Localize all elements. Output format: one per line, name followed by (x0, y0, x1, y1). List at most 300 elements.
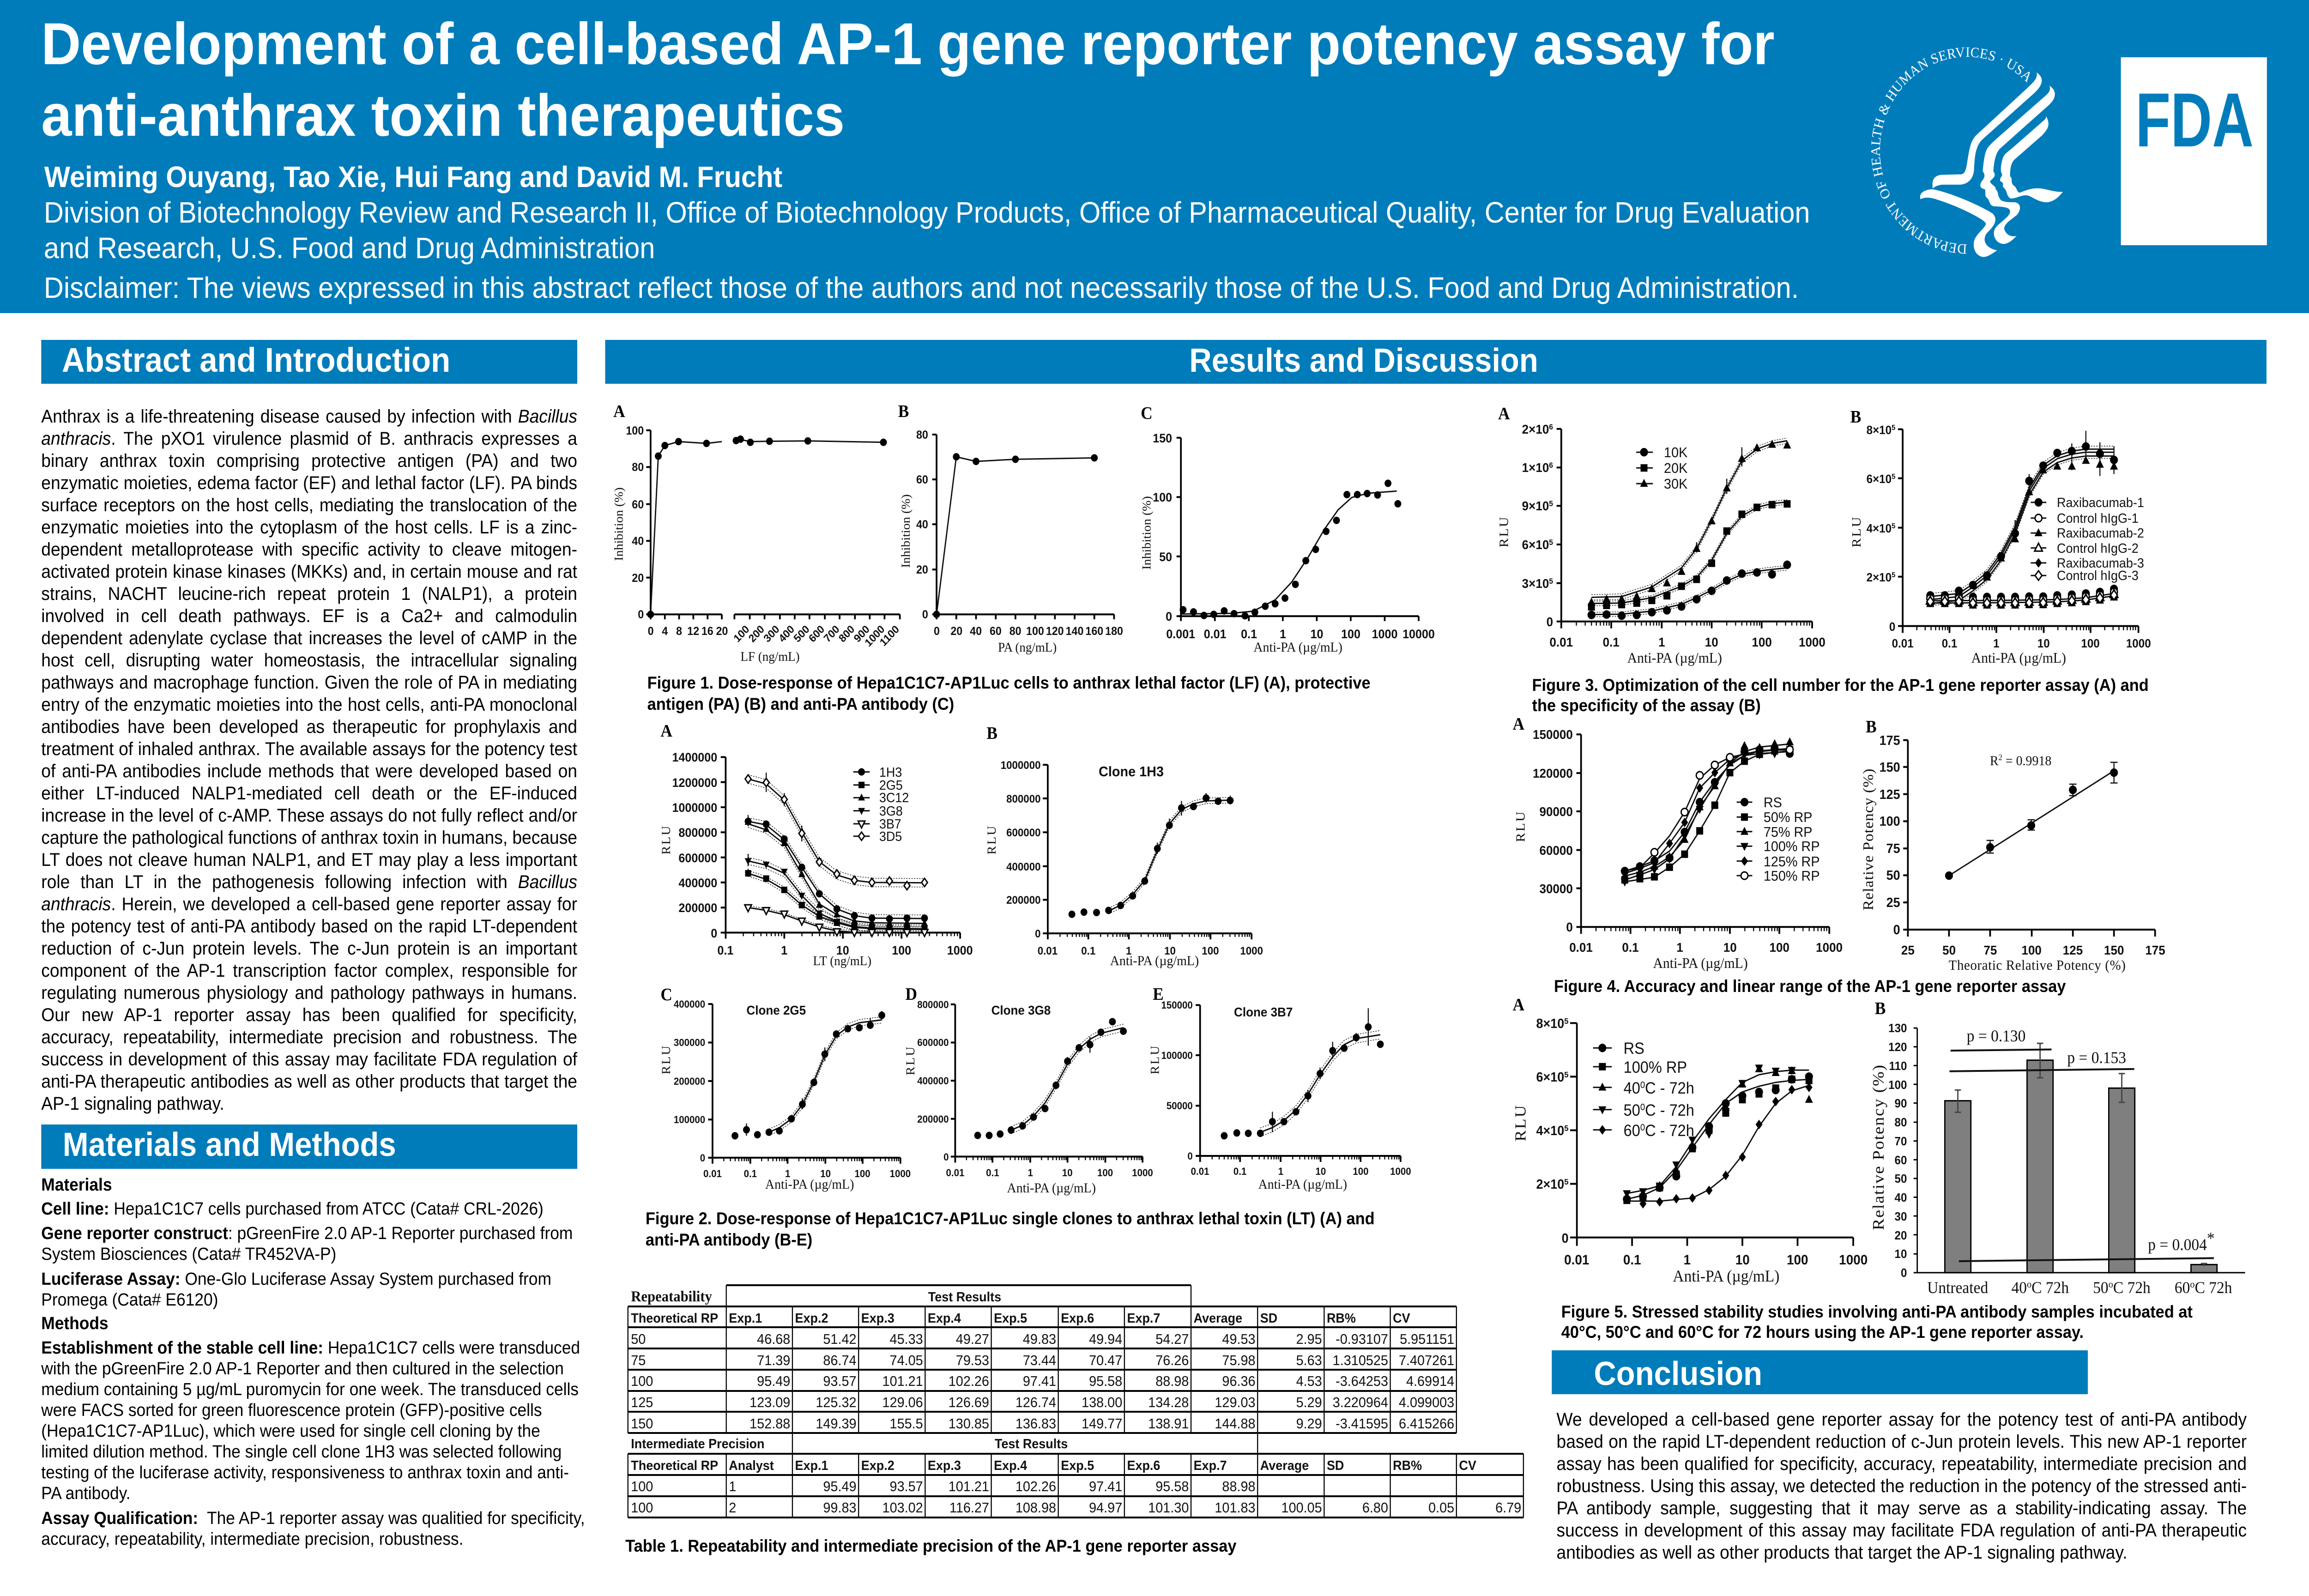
chart: figure 5A stressed samples dose-response: 100% RP (1624, 1058, 1687, 1076)
chart: figure 5A stressed samples dose-response: RLU (1512, 1104, 1529, 1141)
table: repeatability and intermediate precision: 79.53 (956, 1353, 989, 1368)
chart: figure 2B clone 1H3: 200000 (1006, 894, 1041, 906)
table: repeatability and intermediate precision: RB% (1393, 1458, 1422, 1473)
text block: materials and methods: were FACS sorted for green fluorescence protein (GFP)-positive cells (41, 1401, 542, 1420)
heading: Conclusion (1552, 1350, 2088, 1394)
chart: figure 2B clone 1H3: 400000 (1006, 860, 1041, 873)
text block: abstract: either LT-induced NALP1-mediated cell death or the EF-induced (41, 783, 577, 804)
chart: figure 3B assay specificity: 5 (1892, 571, 1896, 579)
panel: header banner (0, 0, 2309, 313)
chart: figure 1B inhibition vs PA: 60 (990, 625, 1002, 638)
chart: figure 2E clone 3B7: E (1153, 984, 1164, 1004)
table: repeatability and intermediate precision: 4.099003 (1399, 1395, 1454, 1410)
chart: figure 4B linearity: Theoratic Relative Potency (%) (1949, 957, 2126, 973)
chart: figure 2D clone 3G8: 0.1 (986, 1167, 999, 1179)
table: repeatability and intermediate precision: 129.06 (882, 1395, 923, 1410)
table: repeatability and intermediate precision: 49.94 (1089, 1331, 1122, 1347)
table: repeatability and intermediate precision: Exp.4 (928, 1311, 961, 1325)
text block: materials and methods: testing of the luciferase activity, responsiveness to anthrax toxin and anti- (41, 1463, 569, 1482)
heading: Materials and Methods (41, 1124, 577, 1169)
chart: figure 2A RLU vs LT for six clones: 1200000 (672, 775, 717, 790)
affiliation: Division of Biotechnology Review and Research II, Office of Biotechnology Products, Office of Pharmaceutical Quality, Center for Drug Evaluation (44, 196, 1810, 229)
table: repeatability and intermediate precision: Theoretical RP (631, 1311, 718, 1325)
chart: figure 2B clone 1H3 (985, 723, 1263, 968)
chart: figure 2E clone 3B7: 1 (1278, 1166, 1283, 1177)
chart: figure 4B linearity: 75 (1886, 841, 1900, 856)
chart: figure 1A inhibition vs LF: 4 (662, 625, 668, 638)
chart: figure 4B linearity: 150 (2104, 943, 2124, 957)
caption: figure 3: the specificity of the assay (B) (1532, 696, 1761, 715)
chart: figure 2C clone 2G5: C (660, 985, 672, 1004)
chart: figure 1A inhibition vs LF: 0 (648, 625, 654, 638)
text block: materials and methods: Materials (41, 1175, 112, 1195)
heading: Abstract and Introduction (41, 340, 577, 384)
table: repeatability and intermediate precision: 97.41 (1089, 1479, 1122, 1494)
chart: figure 2B clone 1H3: Clone 1H3 (1099, 764, 1164, 780)
chart: figure 3B assay specificity: 0 (1889, 620, 1895, 634)
chart: figure 4A accuracy dose-response: 75% RP (1764, 824, 1813, 840)
chart: figure 2E clone 3B7: 100000 (1161, 1050, 1193, 1061)
chart: figure 1A inhibition vs LF: 300 (761, 623, 781, 645)
chart: figure 2E clone 3B7: 0.01 (1191, 1166, 1209, 1177)
chart: figure 1A inhibition vs LF: 800 (836, 623, 857, 645)
text block: abstract: enzymatic moieties into the cytoplasm of the host cells. LF is a zinc- (41, 517, 577, 538)
chart: figure 2D clone 3G8: Anti-PA (µg/mL) (1007, 1180, 1096, 1196)
text block: materials and methods: PA antibody. (41, 1484, 131, 1503)
table: repeatability and intermediate precision: 75.98 (1222, 1353, 1256, 1368)
caption: table 1: Table 1. Repeatability and intermediate precision of the AP-1 gene reporter assay (625, 1536, 1237, 1555)
table: repeatability and intermediate precision: 73.44 (1023, 1353, 1056, 1368)
chart: figure 4B linearity: 150 (1880, 760, 1900, 774)
chart: figure 3A cell number optimization: 0 (1547, 615, 1553, 629)
table: repeatability and intermediate precision: 76.26 (1155, 1353, 1189, 1368)
table: repeatability and intermediate precision: 9.29 (1296, 1416, 1322, 1432)
table: repeatability and intermediate precision: 123.09 (750, 1395, 790, 1410)
chart: figure 2D clone 3G8: 0 (943, 1151, 949, 1163)
chart: figure 5B relative potency bars: 30 (1895, 1210, 1907, 1223)
chart: figure 1A inhibition vs LF: A (613, 401, 625, 421)
chart: figure 5B relative potency bars: C 72h (2031, 1278, 2069, 1297)
chart: figure 4A accuracy dose-response: 1000 (1816, 940, 1843, 955)
table: repeatability and intermediate precision: Average (1194, 1311, 1242, 1325)
chart: figure 1A inhibition vs LF: 60 (632, 498, 644, 511)
chart: figure 5B relative potency bars: 10 (1895, 1247, 1907, 1261)
text block: conclusion: robustness. Using this assay, we detected the reduction in the potency of the stressed anti- (1557, 1476, 2247, 1496)
chart: figure 3B assay specificity: 0.01 (1892, 637, 1914, 650)
chart: figure 2D clone 3G8: 100 (1097, 1167, 1113, 1179)
chart: figure 2C clone 2G5 (659, 985, 911, 1192)
text block: materials and methods: limited dilution method. The single cell clone 1H3 was selected following (41, 1442, 562, 1462)
chart: figure 5B relative potency bars: C 72h (2113, 1278, 2151, 1297)
text block: abstract: component of the AP-1 transcription factor complex, responsible for (41, 961, 577, 981)
chart: figure 3A cell number optimization: RLU (1497, 516, 1511, 547)
caption: figure 4: Figure 4. Accuracy and linear range of the AP-1 gene reporter assay (1554, 977, 2066, 996)
chart: figure 1B inhibition vs PA: Inhibition (%) (899, 494, 913, 568)
table: repeatability and intermediate precision: 95.49 (757, 1373, 790, 1389)
chart: figure 3B assay specificity: Control hIgG-3 (2057, 568, 2139, 583)
text block: abstract: capture the pathological functions of anthrax toxin in humans, because (41, 828, 577, 848)
table: repeatability and intermediate precision: 49.27 (956, 1331, 989, 1347)
chart: figure 2A RLU vs LT for six clones: 3C12 (879, 790, 909, 805)
chart: figure 5A stressed samples dose-response: C - 72h (1645, 1101, 1694, 1119)
text block: materials and methods: Methods (41, 1314, 109, 1333)
table: repeatability and intermediate precision: Exp.2 (795, 1311, 828, 1325)
chart: figure 2B clone 1H3: 800000 (1006, 792, 1041, 805)
chart: figure 1A inhibition vs LF (612, 401, 901, 664)
chart: figure 1A inhibition vs LF: 20 (716, 625, 728, 638)
table: repeatability and intermediate precision: 86.74 (823, 1353, 857, 1368)
text block: abstract: AP-1 signaling pathway. (41, 1094, 224, 1114)
chart: figure 3B assay specificity: 5 (1892, 424, 1896, 432)
chart: figure 1A inhibition vs LF: 100 (731, 623, 751, 645)
chart: figure 3A cell number optimization: 30K (1664, 476, 1687, 492)
chart: figure 3B assay specificity: Control hIgG-1 (2057, 511, 2139, 526)
affiliation: and Research, U.S. Food and Drug Administration (44, 231, 655, 265)
table: repeatability and intermediate precision: 100 (631, 1373, 653, 1389)
chart: figure 1A inhibition vs LF: 16 (701, 625, 713, 638)
chart: figure 3A cell number optimization: 3×10 (1522, 576, 1549, 591)
chart: figure 3A cell number optimization: 5 (1549, 500, 1553, 508)
table: repeatability and intermediate precision: SD (1260, 1311, 1277, 1325)
chart: figure 3B assay specificity: 8×10 (1867, 423, 1892, 437)
chart: figure 5B relative potency bars: 100 (1888, 1078, 1907, 1092)
chart: figure 3B assay specificity: Raxibacumab-3 (2057, 556, 2144, 570)
chart: figure 2B clone 1H3: 0 (1035, 927, 1041, 940)
chart: figure 1C inhibition vs anti-PA: 0.1 (1241, 627, 1257, 641)
chart: figure 4A accuracy dose-response: 30000 (1540, 882, 1573, 896)
chart: figure 3A cell number optimization: 5 (1549, 577, 1553, 586)
table: repeatability and intermediate precision: 108.98 (1015, 1500, 1056, 1516)
table: repeatability and intermediate precision: 5.63 (1296, 1353, 1322, 1368)
chart: figure 3B assay specificity: 1000 (2126, 637, 2151, 650)
caption: figure 5: 40°C, 50°C and 60°C for 72 hours using the AP-1 gene reporter assay. (1561, 1323, 2084, 1342)
chart: figure 5B relative potency bars: o (2027, 1278, 2031, 1290)
chart: figure 2A RLU vs LT for six clones: 1000 (947, 943, 973, 957)
chart: figure 5B relative potency bars: Untreated (1927, 1278, 1988, 1297)
chart: figure 2E clone 3B7: 10 (1316, 1166, 1326, 1177)
text block: abstract: anthracis. Herein, we developed a cell-based gene reporter assay for (41, 894, 577, 914)
chart: figure 3B assay specificity: RLU (1850, 516, 1864, 547)
chart: figure 4A accuracy dose-response (1513, 714, 1843, 971)
chart: figure 2C clone 2G5: 400000 (674, 998, 705, 1010)
table: repeatability and intermediate precision (628, 1285, 1523, 1517)
text block: abstract: dependent metalloprotease with specific activity to cleave mitogen- (41, 539, 577, 560)
chart: figure 4B linearity: 50 (1942, 943, 1956, 957)
chart: figure 1B inhibition vs PA: PA (ng/mL) (998, 640, 1057, 655)
chart: figure 4B linearity: R (1990, 753, 1999, 768)
table: repeatability and intermediate precision: Exp.4 (994, 1458, 1028, 1473)
chart: figure 2D clone 3G8: 1 (1028, 1167, 1033, 1179)
table: repeatability and intermediate precision: RB% (1327, 1311, 1356, 1325)
chart: figure 1B inhibition vs PA: 40 (970, 625, 982, 638)
chart: figure 1C inhibition vs anti-PA: 10000 (1402, 627, 1435, 641)
table: repeatability and intermediate precision: 101.30 (1148, 1500, 1189, 1516)
heading: Results and Discussion: Results and Discussion (1189, 342, 1538, 379)
table: repeatability and intermediate precision: -3.41595 (1336, 1416, 1388, 1432)
chart: figure 1C inhibition vs anti-PA: 1 (1280, 627, 1286, 641)
chart: figure 1C inhibition vs anti-PA: 150 (1153, 431, 1172, 445)
text block: abstract: regulating numerous physiology and pathology pathways in humans. (41, 983, 577, 1003)
chart: figure 5A stressed samples dose-response: C - 72h (1645, 1122, 1694, 1140)
chart: figure 5B relative potency bars: 120 (1888, 1040, 1907, 1054)
table: repeatability and intermediate precision: 103.02 (882, 1500, 923, 1516)
chart: figure 5A stressed samples dose-response: 2×10 (1536, 1177, 1564, 1191)
chart: figure 2A RLU vs LT for six clones: RLU (659, 825, 673, 854)
table: repeatability and intermediate precision: 74.05 (890, 1353, 923, 1368)
table: repeatability and intermediate precision: 49.53 (1222, 1331, 1256, 1347)
chart: figure 2C clone 2G5: RLU (659, 1045, 673, 1074)
table: repeatability and intermediate precision: 4.53 (1296, 1373, 1322, 1389)
heading: Results and Discussion (605, 340, 2267, 384)
chart: figure 3A cell number optimization: 1 (1658, 635, 1665, 649)
table: repeatability and intermediate precision: 125 (631, 1395, 653, 1410)
text block: abstract: pathways and macrophage function. Given the role of PA in mediating (41, 672, 577, 693)
chart: figure 1B inhibition vs PA: 180 (1105, 625, 1123, 638)
table: repeatability and intermediate precision: 4.69914 (1406, 1373, 1454, 1389)
chart: figure 1B inhibition vs PA: 140 (1066, 625, 1083, 638)
chart: figure 1A inhibition vs LF: Inhibition (%) (612, 487, 625, 561)
text block: materials and methods: Assay Qualification: The AP-1 reporter assay was qualitied for specificity, (41, 1509, 585, 1528)
chart: figure 2C clone 2G5: 300000 (674, 1037, 705, 1048)
chart: figure 2E clone 3B7: 0.1 (1233, 1166, 1246, 1177)
chart: figure 5B relative potency bars: 130 (1888, 1022, 1907, 1035)
chart: figure 4A accuracy dose-response: 0 (1566, 920, 1573, 934)
chart: figure 5A stressed samples dose-response (1512, 995, 1868, 1285)
text block: abstract: LT does not cleave human NALP1, and ET may play a less important (41, 850, 577, 870)
chart: figure 1C inhibition vs anti-PA: 0 (1166, 609, 1172, 623)
table: repeatability and intermediate precision: Exp.3 (861, 1311, 895, 1325)
chart: figure 1C inhibition vs anti-PA: Anti-PA (µg/mL) (1253, 640, 1342, 655)
chart: figure 4B linearity: 25 (1901, 943, 1915, 957)
table: repeatability and intermediate precision: 97.41 (1023, 1373, 1056, 1389)
authors: Weiming Ouyang, Tao Xie, Hui Fang and David M. Frucht (44, 160, 782, 193)
chart: figure 1A inhibition vs LF: 12 (687, 625, 699, 638)
table: repeatability and intermediate precision: 6.79 (1495, 1500, 1521, 1516)
chart: figure 1B inhibition vs PA: 120 (1046, 625, 1064, 638)
text block: conclusion: based on the rapid LT-dependent reduction of c-Jun protein levels. This new AP-1 reporter (1557, 1432, 2247, 1452)
table: repeatability and intermediate precision: 7.407261 (1399, 1353, 1454, 1368)
chart: figure 3A cell number optimization: 20K (1664, 460, 1687, 476)
table: repeatability and intermediate precision: Average (1260, 1458, 1309, 1473)
chart: figure 4A accuracy dose-response: 150000 (1533, 727, 1573, 742)
chart: figure 1A inhibition vs LF: 400 (776, 623, 797, 645)
table: repeatability and intermediate precision: SD (1327, 1458, 1344, 1473)
table: repeatability and intermediate precision: 95.58 (1155, 1479, 1189, 1494)
chart: figure 2E clone 3B7: 0 (1187, 1150, 1193, 1162)
chart: figure 5B relative potency bars: 60 (1895, 1154, 1907, 1167)
chart: figure 2B clone 1H3: Anti-PA (µg/mL) (1110, 953, 1199, 968)
table: repeatability and intermediate precision: -3.64253 (1336, 1373, 1388, 1389)
chart: figure 1A inhibition vs LF: 600 (806, 623, 827, 645)
chart: figure 2A RLU vs LT for six clones: 1H3 (879, 765, 902, 780)
chart: figure 1A inhibition vs LF: 20 (632, 572, 644, 585)
chart: figure 5B relative potency bars: 60 (2175, 1278, 2190, 1297)
chart: figure 5B relative potency bars: 50 (1895, 1172, 1907, 1185)
title (41, 8, 1775, 151)
chart: figure 1C inhibition vs anti-PA: 100 (1153, 490, 1172, 504)
chart: figure 5A stressed samples dose-response: 0 (1640, 1080, 1645, 1090)
chart: figure 5A stressed samples dose-response: 4×10 (1536, 1123, 1564, 1138)
text block: abstract (41, 405, 577, 1115)
chart: figure 1A inhibition vs LF: LF (ng/mL) (741, 649, 800, 664)
chart: figure 2D clone 3G8: 400000 (917, 1075, 949, 1087)
text block: conclusion: antibodies as well as other products that target the AP-1 signaling pathway. (1557, 1542, 2128, 1563)
table: repeatability and intermediate precision: Exp.6 (1127, 1458, 1160, 1473)
chart: figure 5A stressed samples dose-response: 10 (1735, 1252, 1750, 1268)
table: repeatability and intermediate precision: -0.93107 (1336, 1331, 1388, 1347)
chart: figure 3B assay specificity: 4×10 (1867, 522, 1892, 535)
chart: figure 3B assay specificity: 1 (1993, 637, 2000, 650)
table: repeatability and intermediate precision: 125.32 (816, 1395, 857, 1410)
table: repeatability and intermediate precision: 50 (631, 1331, 646, 1347)
caption: figure 3: Figure 3. Optimization of the cell number for the AP-1 gene reporter assay (A) and (1532, 676, 2149, 695)
chart: figure 4A accuracy dose-response: 150% RP (1764, 868, 1820, 884)
chart: figure 5A stressed samples dose-response: 0 (1640, 1123, 1645, 1133)
chart: figure 4A accuracy dose-response: 10 (1723, 940, 1737, 955)
heading: Materials and Methods: Materials and Methods (63, 1126, 396, 1163)
chart: figure 4A accuracy dose-response: 125% RP (1764, 854, 1820, 870)
chart: figure 5B relative potency bars: 90 (1895, 1097, 1907, 1110)
table: repeatability and intermediate precision: 2 (729, 1500, 736, 1516)
table: repeatability and intermediate precision: 126.69 (949, 1395, 989, 1410)
chart: figure 2C clone 2G5: 10 (820, 1168, 831, 1179)
chart: figure 3B assay specificity: 5 (1892, 473, 1896, 481)
chart: figure 3B assay specificity: 100 (2081, 637, 2100, 650)
text block: materials and methods: medium containing 5 µg/mL puromycin for one week. The transduced cells (41, 1380, 579, 1399)
chart: figure 1B inhibition vs PA: 0 (922, 608, 928, 621)
chart: figure 5B relative potency bars: Relative Potency (%) (1869, 1065, 1887, 1230)
chart: figure 5B relative potency bars: B (1875, 998, 1886, 1018)
chart: figure 5B relative potency bars (1869, 998, 2245, 1297)
chart: figure 2A RLU vs LT for six clones: 3D5 (879, 829, 902, 844)
text block: abstract: binary anthrax toxin comprising protective antigen (PA) and two (41, 451, 577, 471)
chart: figure 2E clone 3B7: 50000 (1167, 1100, 1193, 1112)
chart: figure 1A inhibition vs LF: 200 (746, 623, 767, 645)
chart: figure 2A RLU vs LT for six clones: 1000000 (672, 800, 717, 815)
chart: figure 4B linearity: 175 (2145, 943, 2165, 957)
text block: materials and methods: System Biosciences (Cata# TR452VA-P) (41, 1245, 336, 1264)
table: repeatability and intermediate precision: 116.27 (949, 1500, 989, 1516)
text block: conclusion: assay has been qualified for specificity, accuracy, repeatability, intermediate precision and (1557, 1454, 2247, 1474)
chart: figure 1A inhibition vs LF: 40 (632, 535, 644, 548)
chart: figure 4B linearity: 75 (1983, 943, 1997, 957)
chart: figure 4A accuracy dose-response: RLU (1514, 810, 1528, 842)
chart: figure 4B linearity: 125 (2063, 943, 2083, 957)
logo: FDA: FDA (2135, 77, 2254, 163)
text block: abstract: role than LT in the pathogenesis following infection with Bacillus (41, 872, 577, 892)
chart: figure 4B linearity: 100 (1880, 814, 1900, 828)
chart: figure 4A accuracy dose-response: 120000 (1533, 766, 1573, 780)
chart: figure 3B assay specificity: 2×10 (1867, 571, 1892, 584)
table: repeatability and intermediate precision: 88.98 (1155, 1373, 1189, 1389)
table: repeatability and intermediate precision: Exp.1 (795, 1458, 828, 1473)
chart: figure 5A stressed samples dose-response: 40 (1624, 1079, 1640, 1097)
chart: figure 2E clone 3B7: Anti-PA (µg/mL) (1258, 1177, 1347, 1192)
text block: abstract: treatment of inhaled anthrax. The available assays for the potency test (41, 739, 577, 759)
text block: abstract: dependent adenylate cyclase that increases the level of cAMP in the (41, 628, 577, 648)
chart: figure 5A stressed samples dose-response: Anti-PA (µg/mL) (1673, 1267, 1779, 1285)
chart: figure 1A inhibition vs LF: 0 (638, 608, 644, 621)
chart: figure 5A stressed samples dose-response: 5 (1564, 1123, 1569, 1133)
chart: figure 4B linearity: 125 (1880, 787, 1900, 802)
chart: figure 4A accuracy dose-response: 50% RP (1764, 810, 1813, 825)
chart: figure 2B clone 1H3: RLU (985, 825, 998, 854)
table: repeatability and intermediate precision: 49.83 (1023, 1331, 1056, 1347)
table: repeatability and intermediate precision: 5.951151 (1400, 1331, 1454, 1347)
table: repeatability and intermediate precision: 136.83 (1015, 1416, 1056, 1432)
heading: Conclusion: Conclusion (1594, 1355, 1762, 1392)
chart: figure 2A RLU vs LT for six clones: 3B7 (879, 816, 901, 831)
affiliation (44, 195, 1810, 266)
chart: figure 2E clone 3B7: 150000 (1161, 999, 1193, 1011)
chart: figure 3A cell number optimization: 6 (1549, 461, 1553, 470)
chart: figure 2C clone 2G5: 0.01 (703, 1168, 722, 1179)
chart: figure 2C clone 2G5: 0.1 (744, 1168, 757, 1179)
text block: materials and methods: Luciferase Assay: One-Glo Luciferase Assay System purchased from (41, 1270, 551, 1289)
chart: figure 3A cell number optimization: Anti-PA (µg/mL) (1627, 649, 1722, 666)
table: repeatability and intermediate precision: 93.57 (823, 1373, 857, 1389)
text block: abstract: success in development of this assay may facilitate FDA regulation of (41, 1049, 577, 1070)
chart: figure 4B linearity: 100 (2021, 943, 2042, 957)
chart: figure 5A stressed samples dose-response: 1000 (1839, 1252, 1868, 1268)
chart: figure 5B relative potency bars: * (2207, 1229, 2215, 1247)
chart: figure 1B inhibition vs PA: 160 (1085, 625, 1103, 638)
table: repeatability and intermediate precision: 1.310525 (1333, 1353, 1388, 1368)
chart: figure 2A RLU vs LT for six clones: 1 (781, 943, 787, 957)
chart: figure 2D clone 3G8: 1000 (1132, 1167, 1153, 1179)
text block: materials and methods (0, 1173, 577, 1556)
chart: figure 5A stressed samples dose-response: 1 (1684, 1252, 1691, 1268)
caption: figure 2 (646, 1208, 1375, 1251)
chart: figure 5A stressed samples dose-response: 0.01 (1564, 1252, 1589, 1268)
chart: figure 2C clone 2G5: 1 (785, 1168, 791, 1179)
chart: figure 2D clone 3G8: RLU (904, 1046, 917, 1075)
table: repeatability and intermediate precision: 149.77 (1082, 1416, 1122, 1432)
table: repeatability and intermediate precision: Exp.2 (861, 1458, 895, 1473)
chart: figure 5B relative potency bars: 70 (1895, 1135, 1907, 1148)
chart: figure 4A accuracy dose-response: RS (1764, 795, 1782, 810)
chart: figure 1C inhibition vs anti-PA: C (1141, 403, 1153, 423)
chart: figure 1C inhibition vs anti-PA (1140, 403, 1435, 655)
chart: figure 4B linearity: = 0.9918 (2002, 753, 2051, 768)
chart: figure 3A cell number optimization: 1×10 (1522, 460, 1549, 475)
table: repeatability and intermediate precision: 138.00 (1082, 1395, 1122, 1410)
text block: materials and methods: Promega (Cata# E6120) (41, 1290, 218, 1310)
chart: figure 5B relative potency bars: p = 0.153 (2067, 1048, 2126, 1067)
chart: figure 5A stressed samples dose-response: 60 (1624, 1122, 1640, 1140)
chart: figure 5A stressed samples dose-response: 0 (1640, 1102, 1645, 1112)
chart: figure 4B linearity (1861, 717, 2165, 973)
chart: figure 5B relative potency bars: 110 (1889, 1059, 1907, 1073)
chart: figure 2C clone 2G5: 1000 (890, 1168, 911, 1179)
chart: figure 3A cell number optimization: 6×10 (1522, 538, 1549, 552)
chart: figure 1C inhibition vs anti-PA: 1000 (1372, 627, 1397, 641)
chart: figure 3A cell number optimization: 10 (1705, 635, 1718, 649)
text block: abstract: activated protein kinase kinases (MKKs) and, in certain mouse and rat (41, 562, 577, 582)
chart: figure 5A stressed samples dose-response: 100 (1787, 1252, 1808, 1268)
table: repeatability and intermediate precision: 95.49 (823, 1479, 857, 1494)
table: repeatability and intermediate precision: 6.415266 (1399, 1416, 1454, 1432)
chart: figure 4A accuracy dose-response: Anti-PA (µg/mL) (1653, 955, 1748, 971)
table: repeatability and intermediate precision: 155.5 (890, 1416, 923, 1432)
table: repeatability and intermediate precision: 130.85 (949, 1416, 989, 1432)
logo: FDA (2121, 57, 2267, 245)
chart: figure 3A cell number optimization: 100 (1752, 635, 1772, 649)
chart: figure 2A RLU vs LT for six clones: 800000 (678, 825, 717, 840)
chart: figure 3B assay specificity: 0.1 (1942, 637, 1957, 650)
chart: figure 2E clone 3B7: 1000 (1390, 1166, 1411, 1177)
chart: figure 2D clone 3G8 (904, 984, 1153, 1196)
